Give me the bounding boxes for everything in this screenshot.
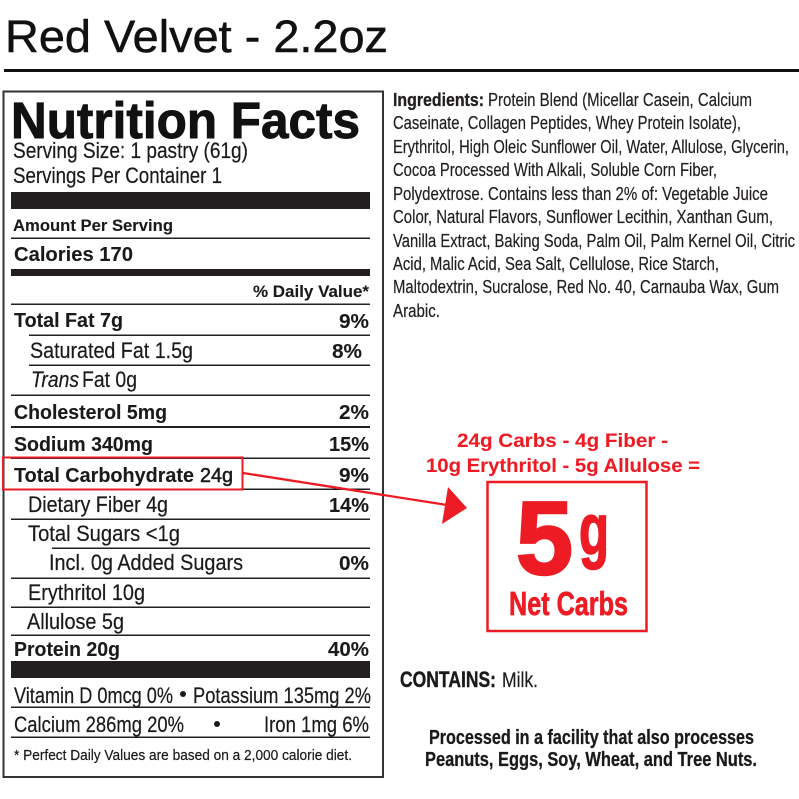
row: added sugars: 0% bbox=[339, 553, 369, 575]
row: added sugars bbox=[49, 550, 369, 575]
net carb equation: 10g Erythritol - 5g Allulose = bbox=[426, 455, 700, 477]
net carbs value bbox=[516, 481, 609, 597]
calories: Calories 170 bbox=[14, 244, 133, 266]
row: total fat: 9% bbox=[339, 311, 369, 333]
text block: ingredients: Ingredients: bbox=[393, 89, 484, 110]
net carbs value: g bbox=[579, 490, 609, 570]
row: saturated fat: 8% bbox=[332, 341, 362, 363]
allergen statement: Milk. bbox=[502, 669, 538, 692]
title: Red Velvet - 2.2oz bbox=[5, 11, 388, 62]
row: erythritol: Erythritol 10g bbox=[28, 580, 145, 605]
footnote: * Perfect Daily Values are based on a 2,000 calorie diet. bbox=[14, 748, 352, 764]
heading: Nutrition Facts: Nutrition Facts bbox=[11, 92, 360, 149]
row: total carbohydrate: 9% bbox=[339, 465, 369, 487]
row: cholesterol: 2% bbox=[339, 402, 369, 424]
row: protein: Protein 20g bbox=[14, 639, 120, 661]
row: protein bbox=[14, 639, 369, 661]
row: vitamin D and potassium: Vitamin D 0mcg 0% bbox=[14, 683, 173, 708]
daily value header: % Daily Value* bbox=[253, 283, 370, 301]
net carbs label: Net Carbs bbox=[509, 585, 628, 622]
row: calcium and iron: Iron 1mg 6% bbox=[264, 712, 369, 737]
panel: net carbs box bbox=[488, 481, 646, 631]
row: saturated fat: Saturated Fat 1.5g bbox=[30, 338, 193, 363]
row: vitamin D and potassium bbox=[14, 683, 371, 708]
row: dietary fiber bbox=[28, 492, 369, 517]
text block: ingredients: Cocoa Processed With Alkali, Soluble Corn Fiber, bbox=[393, 159, 717, 180]
row: total sugars: Total Sugars <1g bbox=[28, 521, 180, 546]
row: total carbohydrate bbox=[14, 465, 369, 487]
row: total fat bbox=[14, 310, 369, 333]
row: cholesterol: Cholesterol 5mg bbox=[14, 402, 167, 424]
arrow: carbohydrate to net carbs bbox=[243, 473, 467, 524]
net carbs value: 5 bbox=[516, 481, 573, 597]
row: saturated fat bbox=[30, 338, 362, 363]
callout: total carbohydrate highlight box bbox=[3, 458, 242, 490]
row: calcium and iron bbox=[14, 712, 369, 737]
row: dietary fiber: 14% bbox=[329, 495, 369, 517]
amount per serving: Amount Per Serving bbox=[13, 217, 173, 235]
row: dietary fiber: Dietary Fiber 4g bbox=[28, 492, 168, 517]
panel: nutrition facts label bbox=[4, 92, 383, 777]
row: trans fat: Fat 0g bbox=[82, 367, 137, 392]
serving information: Serving Size: 1 pastry (61g) bbox=[13, 138, 248, 163]
serving information: Servings Per Container 1 bbox=[13, 163, 222, 188]
row: sodium bbox=[14, 434, 369, 456]
row: total fat: Total Fat 7g bbox=[14, 310, 123, 332]
net carb equation bbox=[426, 430, 700, 477]
row: vitamin D and potassium: Potassium 135mg 2% bbox=[193, 683, 371, 708]
facility warning bbox=[425, 727, 757, 771]
serving information bbox=[13, 138, 248, 188]
row: cholesterol bbox=[14, 402, 369, 424]
row: trans fat: Trans bbox=[31, 367, 79, 392]
net carb equation: 24g Carbs - 4g Fiber - bbox=[457, 430, 668, 452]
text block: ingredients: Acid, Malic Acid, Sea Salt, Cellulose, Rice Starch, bbox=[393, 253, 719, 274]
row: sodium: 15% bbox=[329, 434, 369, 456]
row: total carbohydrate: Total Carbohydrate bbox=[14, 465, 194, 487]
row: sodium: Sodium 340mg bbox=[14, 434, 153, 456]
allergen statement: CONTAINS: bbox=[400, 667, 496, 692]
row: added sugars: Incl. 0g Added Sugars bbox=[49, 550, 243, 575]
row: trans fat bbox=[31, 367, 137, 392]
text block: ingredients: Arabic. bbox=[393, 300, 440, 321]
row: total carbohydrate: 24g bbox=[200, 465, 233, 487]
row: protein: 40% bbox=[328, 639, 369, 661]
row: calcium and iron: Calcium 286mg 20% bbox=[14, 712, 184, 737]
text block: ingredients bbox=[393, 89, 795, 321]
row: allulose: Allulose 5g bbox=[27, 609, 124, 634]
